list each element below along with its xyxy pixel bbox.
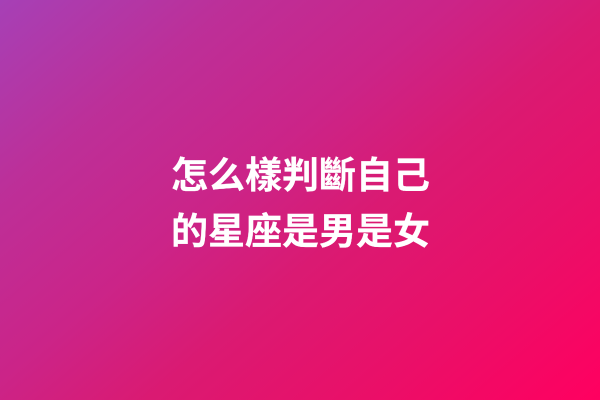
title line 1: 怎么樣判斷自己: [171, 155, 430, 196]
title line 2: 的星座是男是女: [171, 211, 430, 252]
title: [171, 155, 430, 252]
